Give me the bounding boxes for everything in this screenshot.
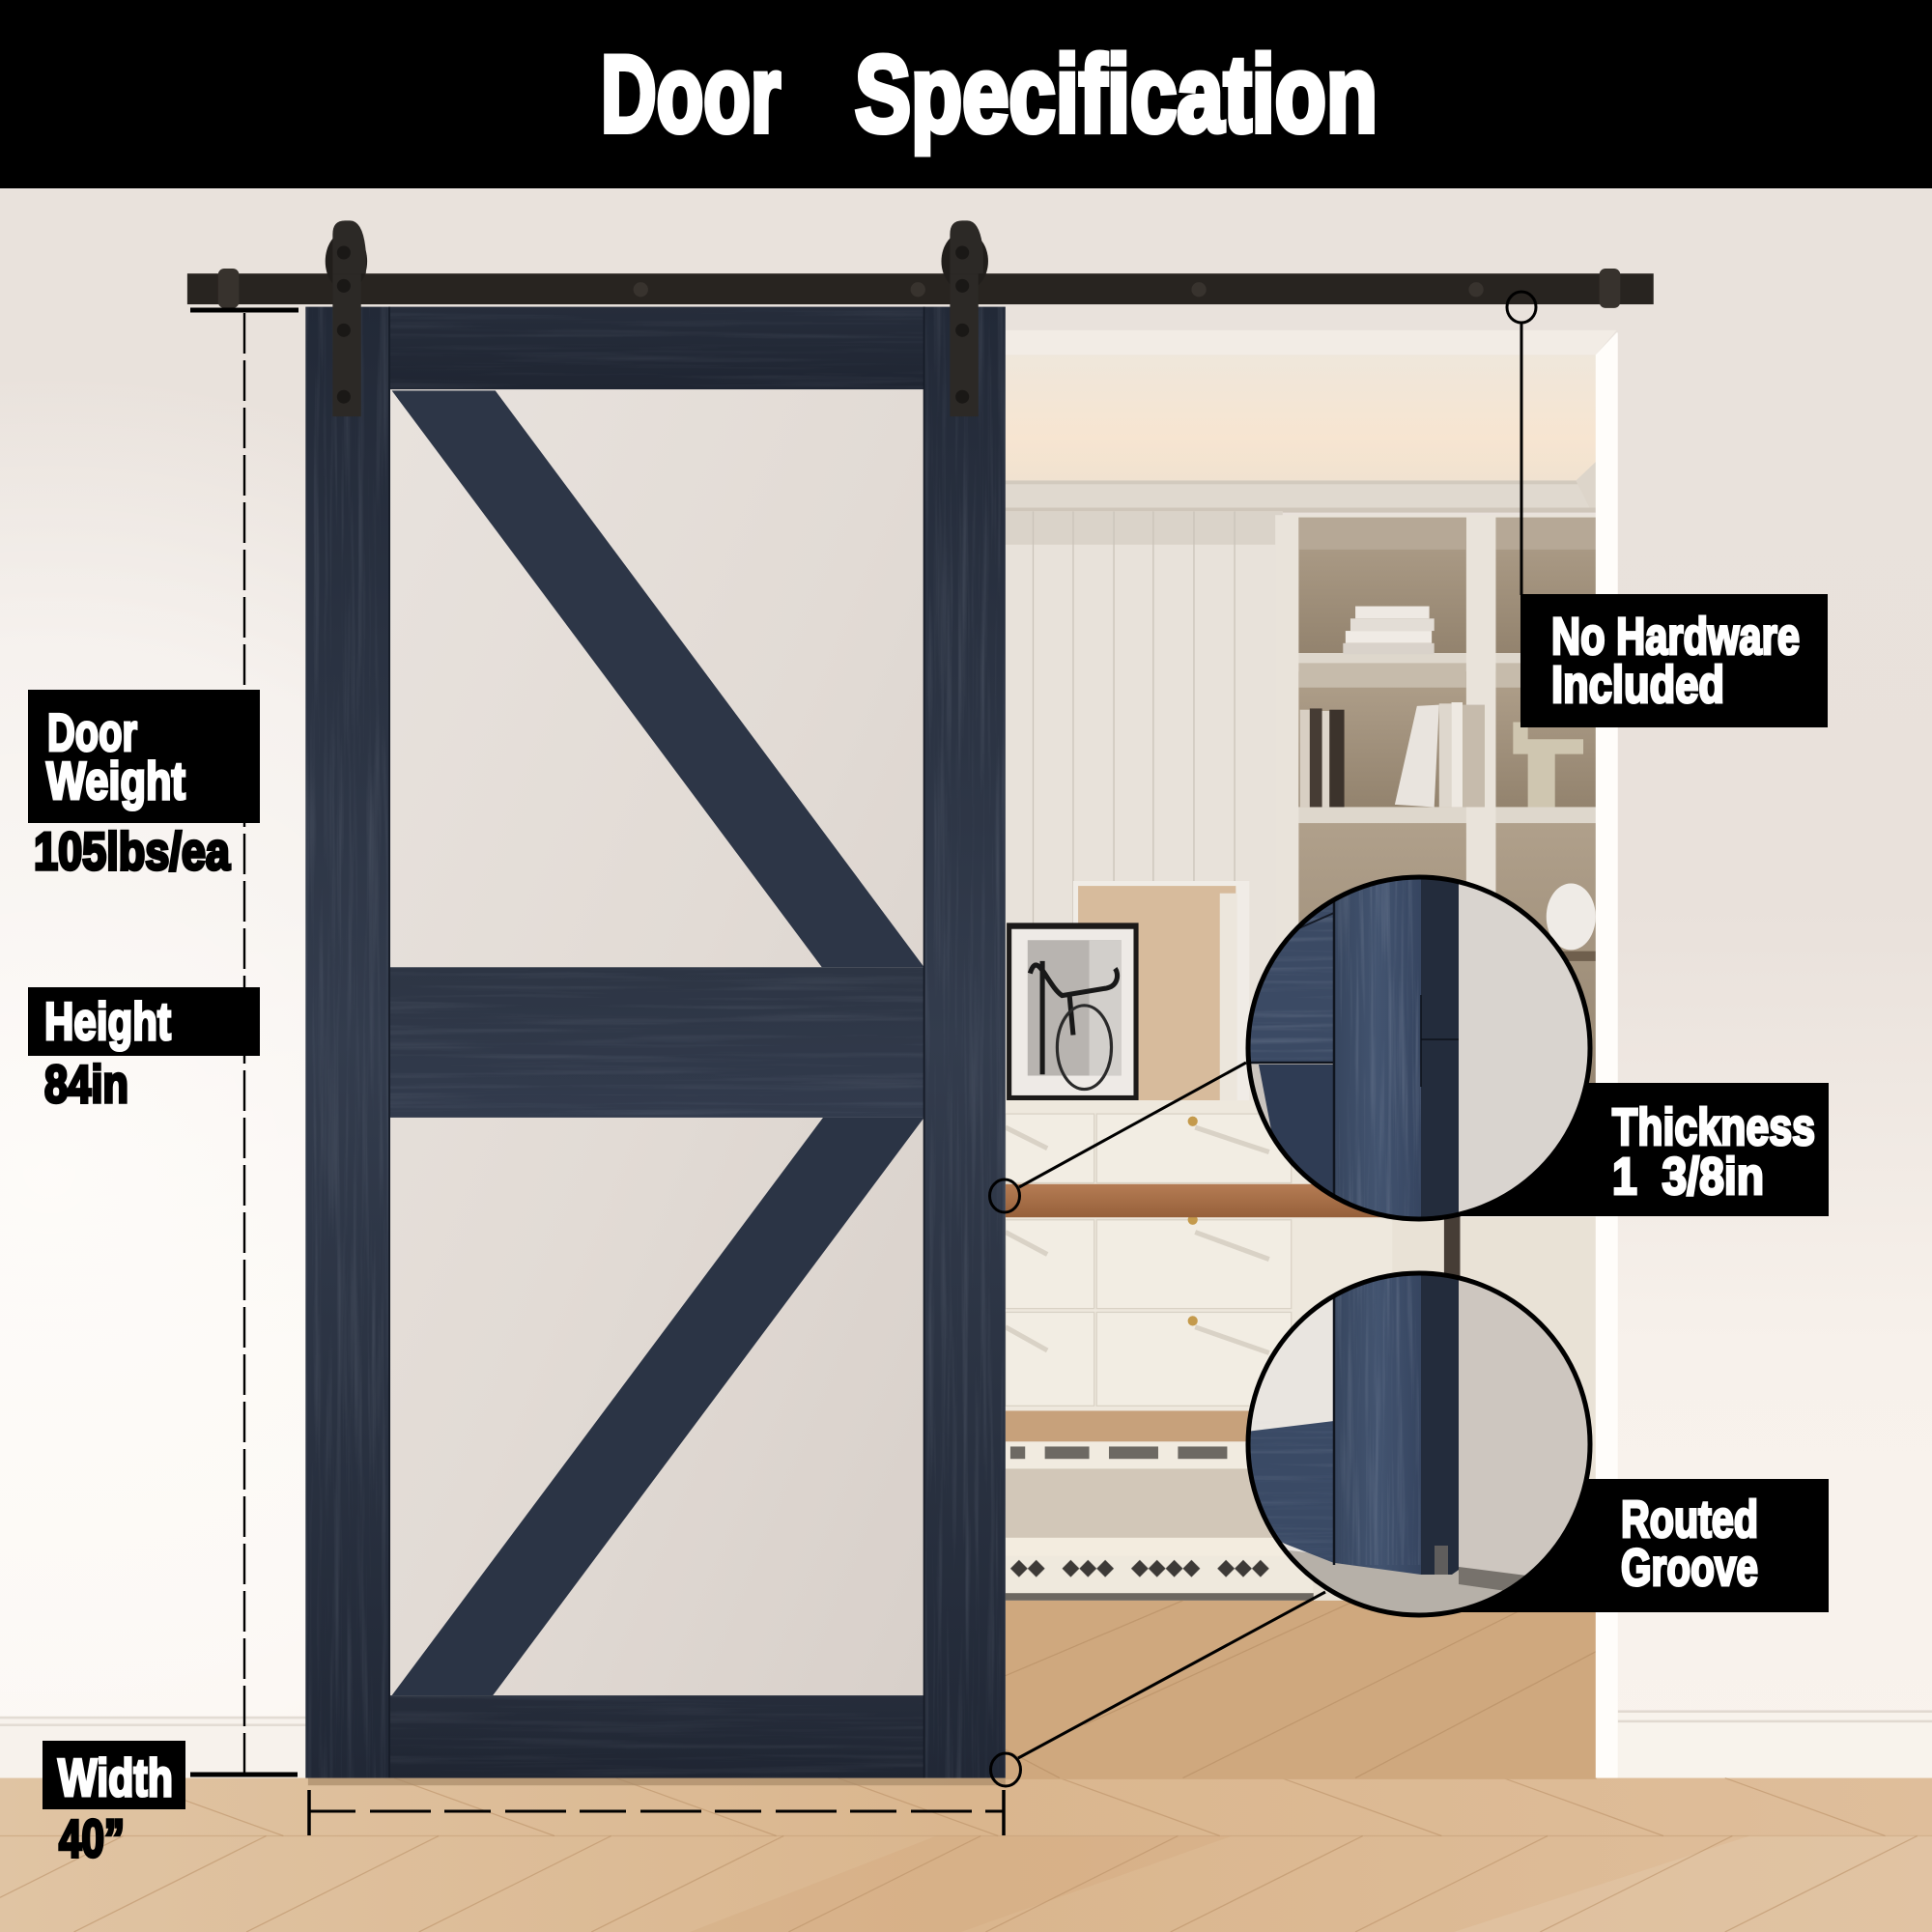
bottom rail detail [1246,1421,1334,1563]
label: no hardware included: No Hardware [1551,608,1800,666]
top rail [389,307,924,389]
label: routed groove: Routed [1621,1491,1758,1548]
framed bicycle print [1007,923,1139,1100]
upper brace [392,390,924,967]
left stile [305,307,389,1778]
lower brace [392,1118,924,1695]
barn door track [187,220,1654,416]
door thickness edge with groove [1421,1270,1459,1575]
rug [1006,1441,1314,1601]
door thickness edge [1421,874,1459,1222]
label: thickness: Thickness [1612,1098,1815,1156]
panelled wall [1006,511,1283,1115]
soffit above doorway [1006,330,1616,355]
baseboards [0,1710,1932,1778]
label: no hardware included: Included [1551,656,1724,714]
door rail [1250,903,1333,1062]
label: height: Height [44,991,171,1051]
detail circle: thickness [1246,874,1594,1222]
door infill panels [389,389,924,1695]
label: door weight: Door [47,702,137,762]
header bar [0,0,1932,188]
label: door weight [28,690,260,823]
label: width [43,1741,185,1809]
left stopper [218,269,239,308]
pointer to groove detail [991,1592,1325,1786]
middle rail [389,967,924,1118]
right stile [924,307,1006,1778]
counter top [1006,1184,1412,1217]
beige art print [1073,881,1249,1103]
label: door weight: Weight [46,751,185,810]
door jamb [1596,332,1618,1778]
door floor shadow [308,1778,1006,1785]
rail bolts [634,282,1484,297]
floor [0,1778,1932,1932]
stacked books [1343,607,1435,654]
door face edge [1335,1270,1421,1575]
bottom rail [389,1695,924,1778]
bookcase [1275,515,1597,1119]
crown molding [1006,461,1597,513]
value: height: 84in [44,1054,128,1114]
detail circle: routed groove [1246,1270,1594,1618]
door face edge [1335,874,1421,1222]
lower brace detail [1259,1065,1333,1193]
interior side wall [1293,1410,1597,1602]
interior floor [1006,1410,1314,1443]
label: thickness [1459,1083,1829,1216]
cabinets [1006,1100,1597,1414]
width dimension line [309,1790,1004,1835]
left hanger [326,220,367,416]
label: routed groove: Groove [1621,1539,1758,1597]
doorway interior [1006,355,1597,1779]
label: thickness: 1 3/8in [1612,1148,1764,1206]
sculpture [1513,722,1583,807]
upright books [1300,702,1485,807]
title: Specification [855,34,1378,155]
lower interior floor [1006,1601,1597,1779]
dark post [1444,1213,1460,1288]
value: width: 40” [59,1808,125,1868]
label: no hardware included [1520,594,1828,727]
barn door [305,307,1006,1785]
right stopper [1600,269,1620,308]
rail [187,273,1654,304]
label: height [28,987,260,1056]
height dimension line [190,310,298,1775]
label: width: Width [58,1747,173,1807]
value: door weight: 105lbs/ea [34,821,230,881]
floor [1289,1549,1502,1613]
pointer to thickness detail [989,1063,1246,1212]
label: routed groove [1459,1479,1829,1612]
callout: no hardware pointer [1507,292,1536,595]
title [601,34,1378,155]
title: Door [601,34,781,155]
interior ceiling [1006,355,1597,483]
vase [1547,884,1596,950]
right hanger [941,220,988,416]
